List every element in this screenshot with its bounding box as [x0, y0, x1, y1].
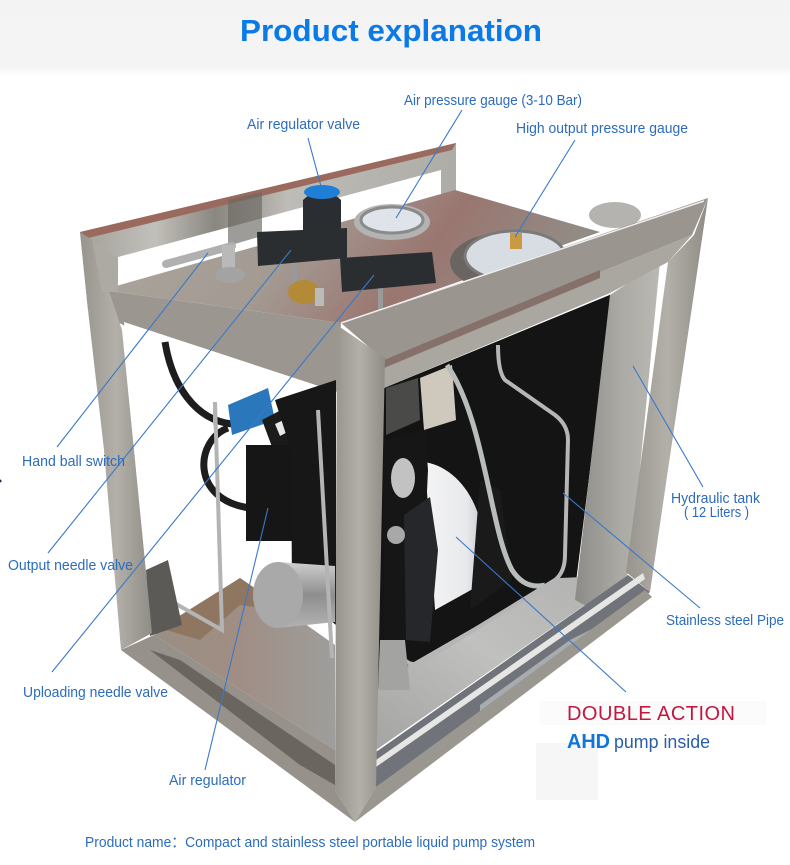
back rail [80, 143, 456, 320]
rear gauge fitting [589, 202, 641, 228]
white interior gap [124, 322, 337, 700]
air pressure gauge [354, 204, 430, 240]
pump foot [378, 640, 410, 690]
plate front apron [100, 290, 341, 392]
callout: double action: DOUBLE ACTION [567, 703, 735, 725]
pump right cap [470, 480, 512, 610]
hydraulic tank [575, 262, 660, 608]
wood reflection [160, 578, 290, 640]
bolt [387, 526, 405, 544]
label: uploading needle valve: Uploading needle valve [23, 684, 168, 701]
air regulator valve knob [303, 185, 341, 232]
callout: AHD pump inside: AHD [567, 731, 610, 753]
steel pipe [405, 345, 568, 664]
motor [246, 445, 296, 541]
clear hose [447, 365, 545, 586]
edge dot [0, 480, 2, 482]
label: hydraulic tank: ( 12 Liters ) [684, 504, 749, 521]
label: hydraulic tank: Hydraulic tank [671, 490, 760, 507]
pump left cap [384, 430, 428, 640]
high output pressure gauge [450, 231, 570, 292]
left post [80, 232, 152, 650]
callout backdrop [540, 701, 766, 725]
label: high output pressure gauge: High output pressure gauge [516, 120, 688, 137]
right rail [341, 198, 708, 388]
left base rail [121, 635, 355, 822]
title: Product explanation [240, 13, 542, 48]
air hose [165, 342, 250, 508]
label: output needle valve: Output needle valve [8, 557, 133, 574]
pump cylinder [384, 430, 512, 642]
uploading needle valve handle [340, 252, 436, 320]
label: air regulator valve: Air regulator valve [247, 116, 360, 133]
leader lines [48, 110, 703, 770]
top plate [102, 190, 600, 323]
product name: Product name：Compact and stainless steel portable liquid pump system [85, 834, 535, 851]
silver cylinder [253, 562, 335, 628]
right lower rails [376, 573, 650, 787]
label: air regulator: Air regulator [169, 772, 246, 789]
floor plate right [376, 575, 628, 750]
right base edge [355, 590, 652, 822]
output needle valve handle [257, 228, 347, 295]
pump body left [275, 380, 336, 625]
label: hand ball switch: Hand ball switch [22, 453, 125, 470]
bracket [146, 560, 182, 636]
pump clamp block [404, 497, 438, 642]
blue solenoid [228, 388, 275, 435]
callout: AHD pump inside: pump inside [614, 732, 710, 752]
brass fitting [288, 280, 324, 306]
left inner post face [92, 240, 118, 292]
dark interior [376, 294, 612, 690]
far post [626, 198, 708, 592]
label: air pressure gauge: Air pressure gauge (3-10 Bar) [404, 92, 582, 109]
sight glass [391, 458, 415, 498]
callout patch [536, 743, 598, 800]
hand ball switch [166, 245, 245, 283]
machine illustration [80, 143, 708, 822]
floor plate left [154, 578, 335, 750]
beige block behind [420, 365, 456, 430]
left pipe [155, 402, 332, 658]
front post [335, 325, 385, 822]
silencer [262, 398, 325, 455]
header band [0, 0, 790, 76]
